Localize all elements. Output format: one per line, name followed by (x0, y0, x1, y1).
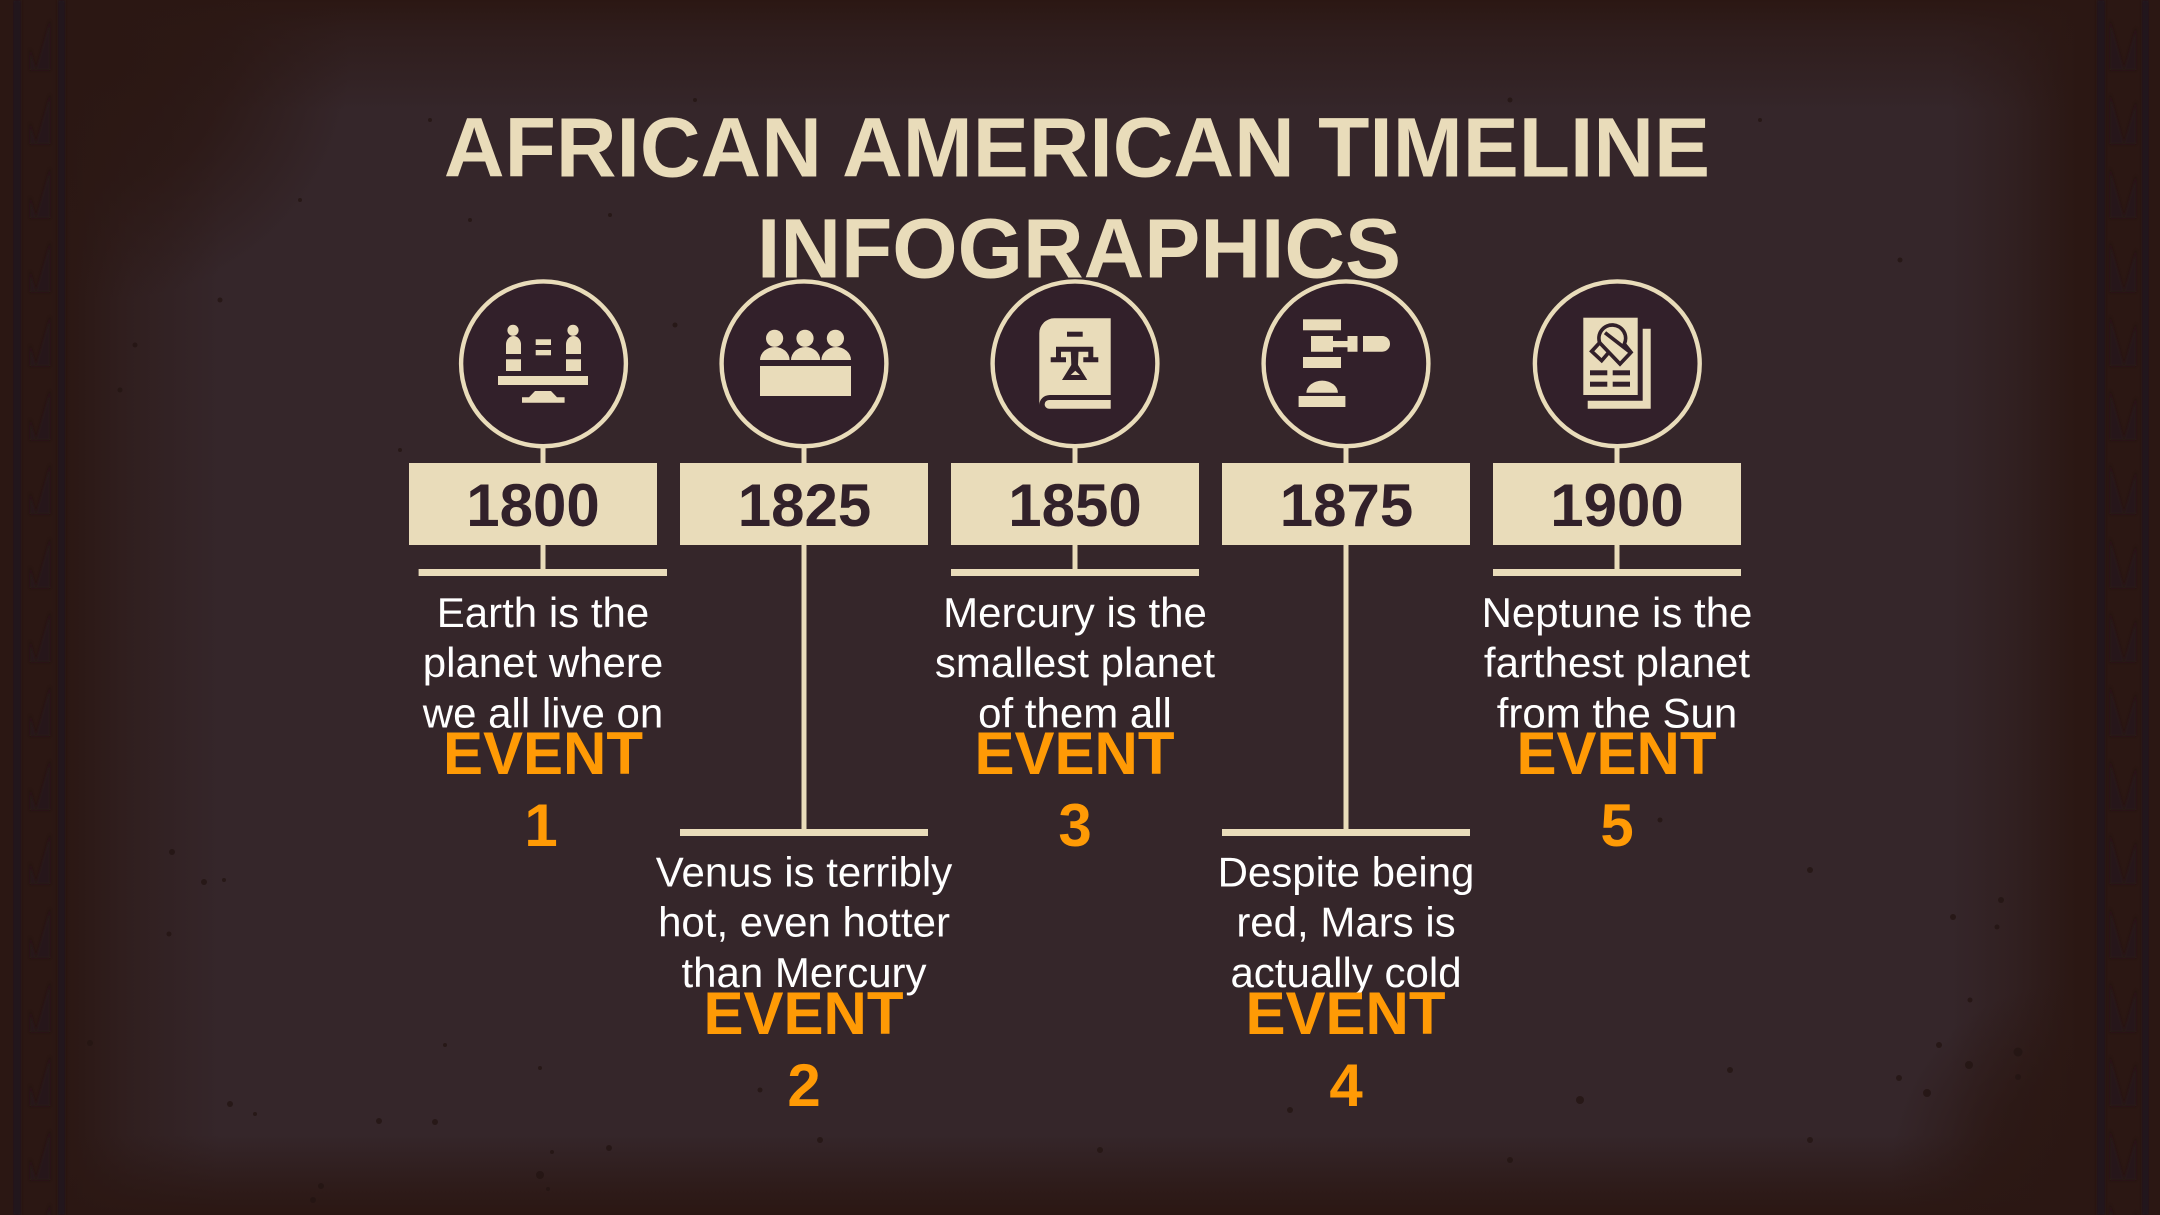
event label: 4: EVENT (1245, 980, 1446, 1047)
bar: 1800 (419, 569, 667, 576)
title: INFOGRAPHICS (757, 202, 1401, 296)
event label: 4: 4 (1329, 1052, 1363, 1119)
connector: 1825 (802, 445, 806, 831)
year: 1800: 1800 (466, 472, 600, 539)
title: AFRICAN AMERICAN TIMELINE (444, 100, 1710, 194)
marker circle: 1850 (993, 281, 1157, 446)
connector: 1850 (1072, 445, 1078, 571)
year: 1825: 1825 (738, 472, 871, 539)
icon: jury (760, 330, 851, 396)
description: 1825: Venus is terribly (656, 848, 952, 896)
connector: 1875 (1344, 445, 1348, 831)
description: 1900: from the Sun (1497, 690, 1737, 736)
event label: 2: EVENT (703, 980, 904, 1047)
timeline item: 1900 (1482, 281, 1752, 859)
marker circle: 1875 (1264, 281, 1428, 446)
bar: 1900 (1493, 569, 1741, 576)
icon: debate at table (498, 325, 588, 403)
year box: 1875 (1222, 463, 1470, 545)
description: 1850: of them all (978, 690, 1172, 736)
year: 1875: 1875 (1280, 472, 1413, 539)
year: 1850: 1850 (1008, 472, 1142, 539)
event label: 2: 2 (787, 1052, 821, 1119)
event label: 3: EVENT (974, 720, 1175, 787)
marker circle: 1825 (722, 281, 886, 446)
description: 1875: Despite being (1218, 848, 1474, 896)
year box: 1900 (1493, 463, 1741, 545)
event label: 3: 3 (1058, 792, 1092, 859)
description: 1800: we all live on (422, 690, 663, 736)
year box: 1800 (409, 463, 657, 545)
description: 1800: planet where (423, 639, 663, 686)
description: 1825: hot, even hotter (658, 898, 950, 946)
timeline item: 1825 (656, 281, 952, 1119)
year box: 1850 (951, 463, 1199, 545)
description: 1875: actually cold (1230, 949, 1462, 996)
description: 1825: than Mercury (681, 949, 927, 996)
icon: newspaper with ribbon (1583, 318, 1651, 409)
event label: 1: EVENT (443, 720, 643, 787)
icon: gavel (1299, 319, 1390, 407)
description: 1850: Mercury is the (943, 589, 1207, 636)
connector: 1900 (1614, 445, 1620, 571)
timeline item: 1850 (935, 281, 1215, 859)
timeline item: 1875 (1218, 281, 1474, 1119)
event label: 1: 1 (524, 792, 558, 859)
description: 1900: Neptune is the (1482, 589, 1752, 636)
bar: 1875 (1222, 829, 1470, 836)
description: 1800: Earth is the (437, 589, 649, 636)
bar: 1850 (951, 569, 1199, 576)
marker circle: 1900 (1535, 281, 1700, 446)
description: 1875: red, Mars is (1236, 898, 1456, 946)
year: 1900: 1900 (1550, 472, 1684, 539)
icon: law book (1039, 318, 1111, 409)
year box: 1825 (680, 463, 928, 545)
connector: 1800 (540, 445, 546, 571)
event label: 5: EVENT (1516, 720, 1717, 787)
bar: 1825 (680, 829, 928, 836)
marker circle: 1800 (461, 281, 626, 446)
description: 1900: farthest planet (1484, 639, 1750, 686)
timeline item: 1800 (409, 281, 667, 859)
event label: 5: 5 (1600, 792, 1634, 859)
description: 1850: smallest planet (935, 639, 1215, 686)
